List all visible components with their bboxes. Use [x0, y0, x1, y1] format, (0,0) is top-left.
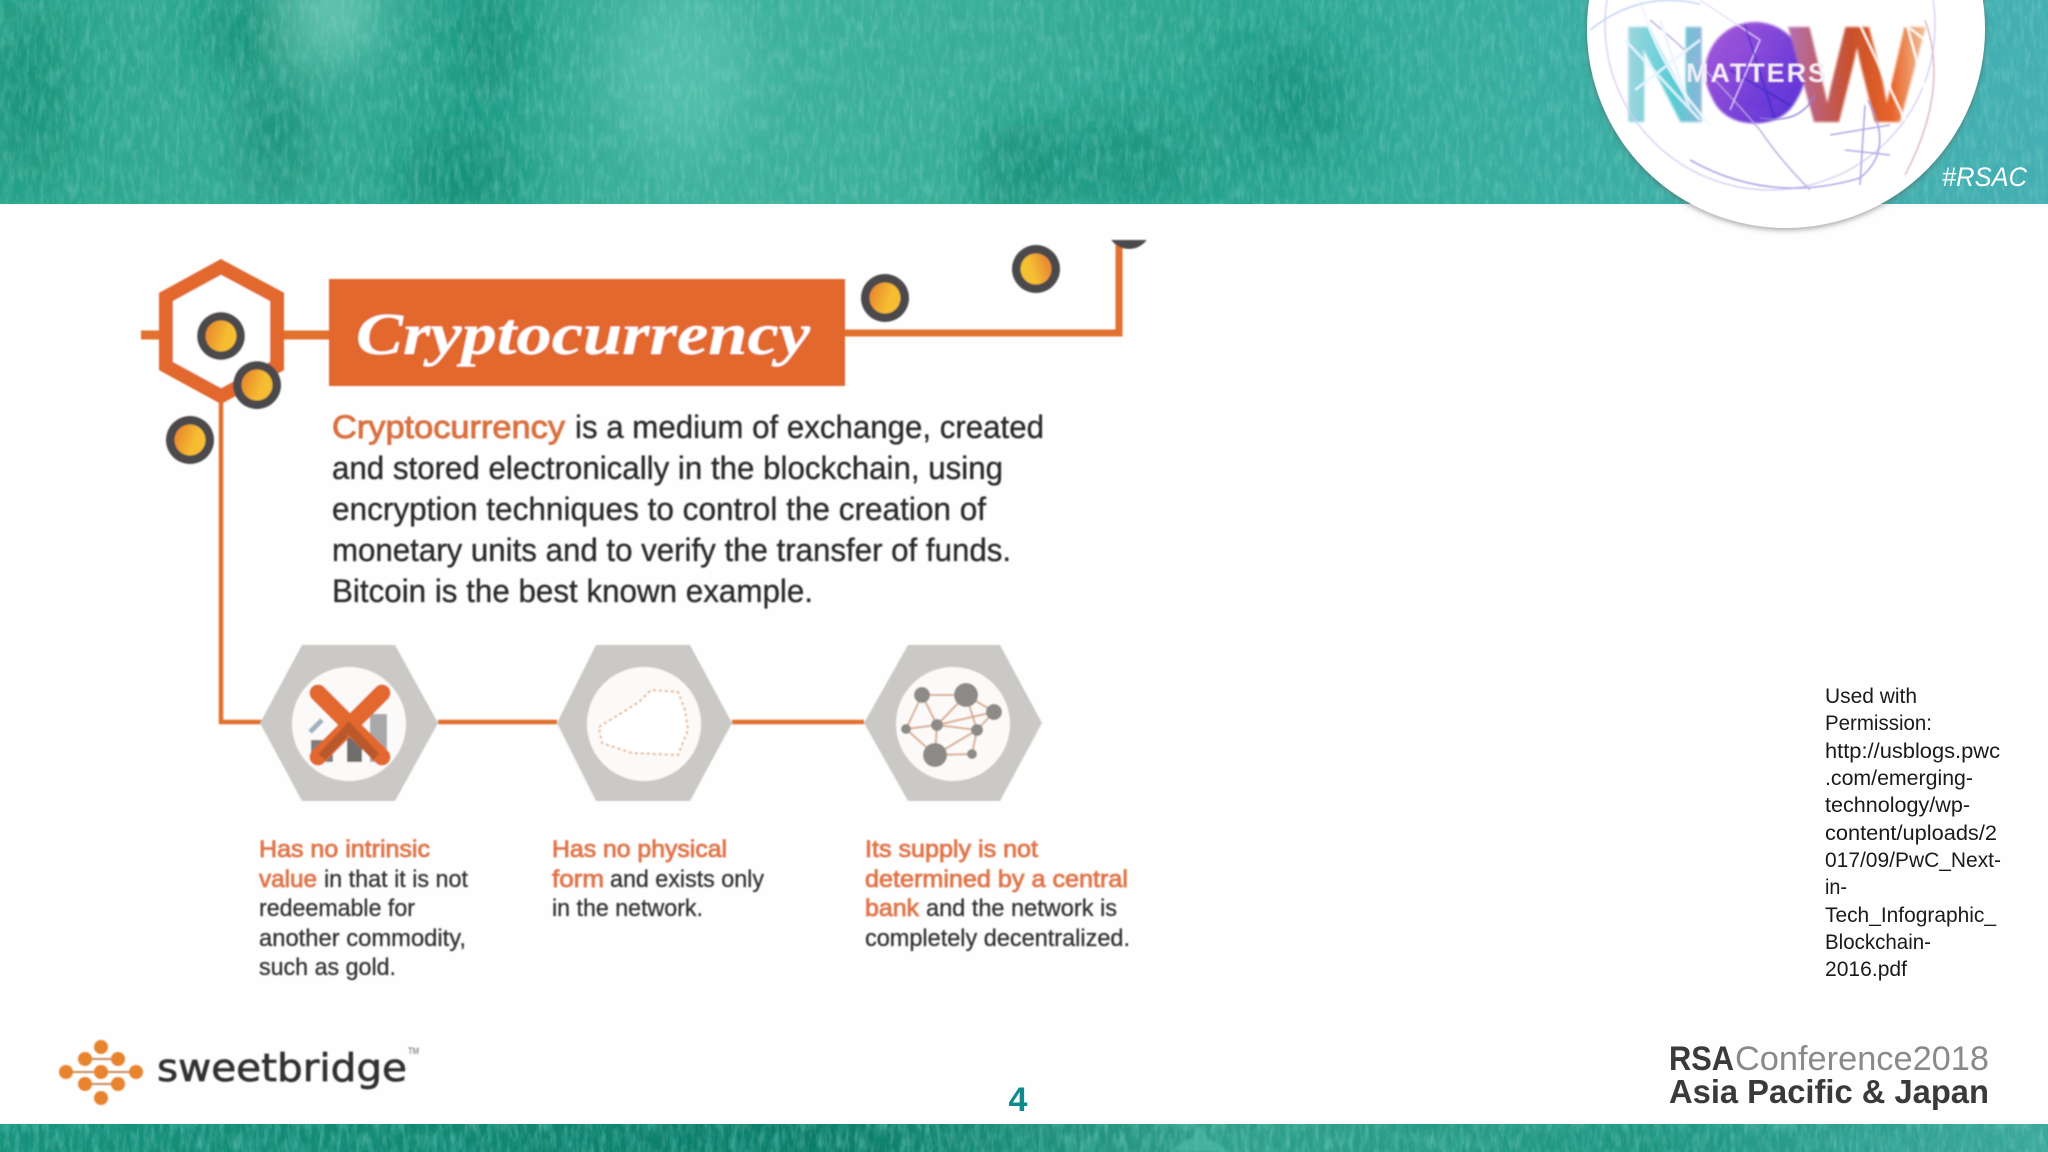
definition text: is a medium of exchange, created: [575, 409, 1044, 445]
definition text: monetary units and to verify the transfer of funds.: [332, 532, 1011, 568]
definition text: Bitcoin is the best known example.: [332, 573, 813, 609]
rsa conference logo: [1669, 1040, 1989, 1110]
icon: sweetbridge lattice: [59, 1040, 143, 1105]
coin: [861, 274, 909, 322]
feature 3 caption: [865, 836, 1130, 952]
title: Cryptocurrency: [356, 301, 811, 367]
coin: [233, 361, 281, 409]
feature 1 caption: another commodity,: [259, 925, 466, 952]
feature 2 caption: Has no physical: [552, 836, 727, 863]
feature 1 caption: value: [259, 866, 317, 893]
feature 3 caption: completely decentralized.: [865, 925, 1130, 952]
feature 1 hexagon icon: no intrinsic value: [260, 645, 438, 801]
feature 2 caption: form: [552, 866, 604, 893]
feature 1 caption: [259, 836, 468, 981]
infographic: [141, 205, 1151, 981]
word: now: N: [1620, 0, 1710, 152]
feature 1 caption: such as gold.: [259, 954, 396, 981]
coin: [1012, 245, 1060, 293]
word: now: W: [1788, 0, 1927, 152]
feature 3 hexagon icon: network: [864, 645, 1042, 801]
connector lines: [141, 240, 1119, 722]
word: now: O: [1702, 0, 1808, 152]
attribution note: Used with: [1825, 685, 1917, 708]
header band: [0, 0, 2048, 220]
feature 2 caption: in the network.: [552, 895, 703, 922]
feature 1 caption: in that it is not: [324, 866, 468, 893]
feature 3 caption: and the network is: [926, 895, 1117, 922]
title banner: [329, 279, 845, 386]
feature 1 caption: redeemable for: [259, 895, 415, 922]
feature 2 caption: and exists only: [610, 866, 764, 893]
sweetbridge logo: [59, 1040, 419, 1105]
attribution note: Tech_Infographic_: [1825, 904, 1996, 927]
attribution note: content/uploads/2: [1825, 822, 1997, 845]
page number: 4: [1009, 1081, 1028, 1119]
rsa conference logo: Asia Pacific & Japan: [1669, 1073, 1989, 1110]
rsa conference logo: Conference2018: [1735, 1040, 1989, 1078]
footer band: [0, 1124, 2048, 1152]
attribution note: [1825, 685, 2001, 981]
orange header hexagon: [166, 267, 277, 396]
definition text: [332, 409, 1044, 609]
definition text: encryption techniques to control the creation of: [332, 491, 986, 527]
feature 3 caption: determined by a central: [865, 866, 1128, 893]
word: matters: MATTERS: [1686, 58, 1826, 88]
feature 1 caption: Has no intrinsic: [259, 836, 430, 863]
attribution note: 017/09/PwC_Next-: [1825, 849, 2001, 872]
word: now: [1620, 0, 1927, 152]
wordmark: sweetbridge: [157, 1046, 407, 1090]
attribution note: in-: [1825, 876, 1847, 899]
feature 2 hexagon icon: no physical form: [557, 645, 732, 801]
rsa conference logo: RSA: [1669, 1040, 1734, 1078]
attribution note: Blockchain-: [1825, 931, 1931, 954]
attribution note: .com/emerging-: [1825, 767, 1973, 790]
globe network lines: [1590, 0, 1935, 190]
trademark: TM: [408, 1046, 419, 1056]
clipped coin: [1110, 239, 1148, 250]
feature 3 caption: Its supply is not: [865, 836, 1038, 863]
conference badge: now matters globe: [1587, 0, 1985, 228]
feature 3 caption: bank: [865, 895, 920, 922]
definition text: Cryptocurrency: [332, 409, 565, 445]
attribution note: 2016.pdf: [1825, 958, 1907, 981]
attribution note: Permission:: [1825, 712, 1932, 735]
attribution note: technology/wp-: [1825, 794, 1970, 817]
definition text: and stored electronically in the blockchain, using: [332, 450, 1003, 486]
coin: [197, 312, 245, 360]
attribution note: http://usblogs.pwc: [1825, 740, 2000, 763]
feature 2 caption: [552, 836, 764, 922]
coin: [166, 416, 214, 464]
hashtag: #RSAC: [1942, 162, 2027, 192]
